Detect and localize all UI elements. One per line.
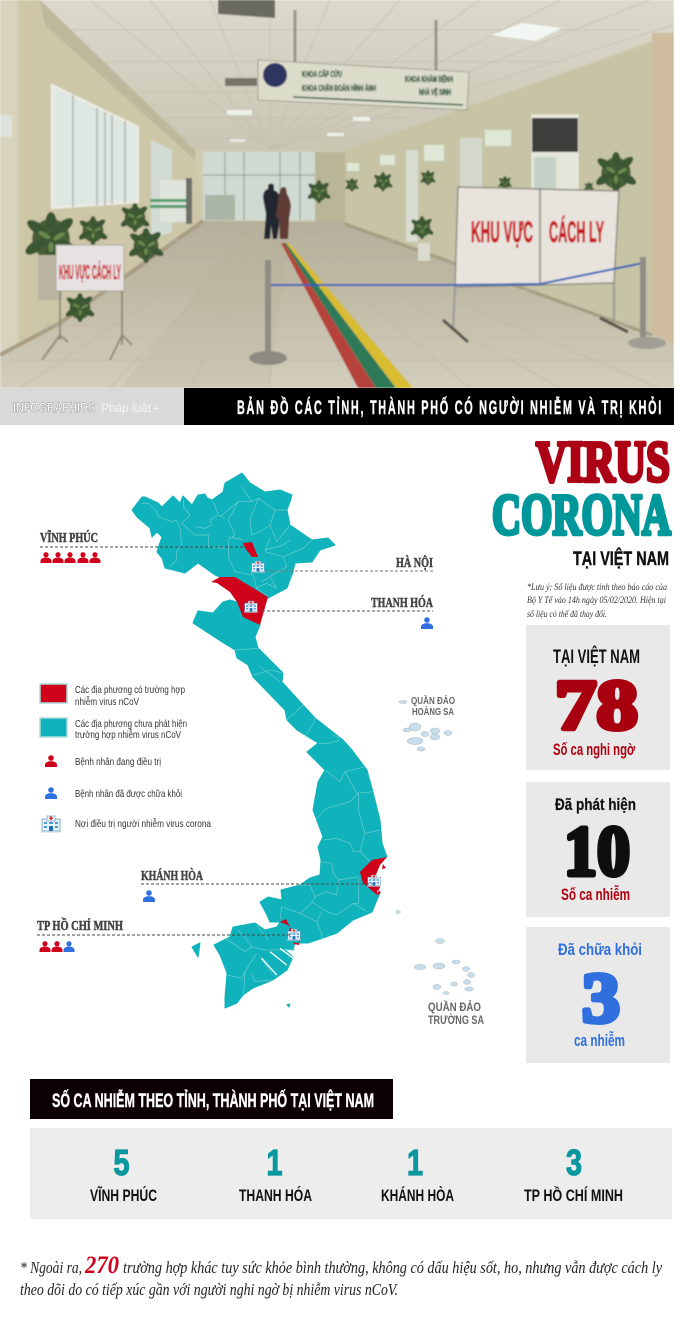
header bar: infographics brand: INFOGRAPHICS xyxy=(13,399,95,415)
stat card: suspected cases: TẠI VIỆT NAM xyxy=(553,646,640,668)
quarantine sign: right: KHU VỰC xyxy=(471,216,533,249)
stat card: recovered cases: 3 xyxy=(582,960,620,1038)
header bar: infographics brand xyxy=(0,388,184,425)
stat card: detected cases: Đã phát hiện xyxy=(555,795,636,814)
header bar: infographics brand: + xyxy=(153,403,159,415)
callout: Vĩnh Phúc: VĨNH PHÚC xyxy=(40,530,98,545)
stat: Thanh Hóa xyxy=(239,1142,312,1205)
stat card: suspected cases: 78 xyxy=(555,667,638,745)
map legend: Các địa phương chưa phát hiện xyxy=(75,718,187,730)
callout: Thanh Hóa xyxy=(262,595,433,629)
stat card: recovered cases xyxy=(526,927,670,1063)
stat card: suspected cases: Số ca nghi ngờ xyxy=(553,740,636,759)
hanging direction sign: NHÀ VỆ SINH xyxy=(419,88,451,97)
people in corridor xyxy=(263,184,280,239)
map legend: Bệnh nhân đang điều trị xyxy=(75,756,161,768)
archipelago: Hoàng Sa xyxy=(399,694,455,751)
stat: Khánh Hòa: 1 xyxy=(407,1142,423,1183)
hospital icon: TP Hồ Chí Minh xyxy=(287,929,301,941)
teal country shape xyxy=(132,473,387,1008)
Khánh Hòa xyxy=(360,857,387,895)
callout: TP Hồ Chí Minh: TP HỒ CHÍ MINH xyxy=(37,918,123,933)
map legend: Các địa phương có trường hợp xyxy=(75,684,185,696)
stat: TP Hồ Chí Minh xyxy=(524,1142,623,1205)
footnote: theo dõi do có tiếp xúc gần với người nghi ngờ bị nhiễm virus nCoV. xyxy=(20,1280,398,1299)
section heading: cases by province xyxy=(30,1079,393,1119)
hospital icon: Khánh Hòa xyxy=(367,875,381,887)
map legend: Nơi điều trị người nhiễm virus corona xyxy=(75,817,211,830)
hanging direction sign: KHOA CẤP CỨU xyxy=(302,69,342,79)
right wall xyxy=(345,35,674,345)
infected provinces in red xyxy=(211,542,387,945)
stat: TP Hồ Chí Minh: 3 xyxy=(566,1142,582,1183)
floor stripes xyxy=(281,243,376,388)
map legend xyxy=(40,684,211,832)
ceiling xyxy=(40,0,674,150)
quarantine sign: left xyxy=(42,245,132,360)
panel: cases by province xyxy=(30,1128,672,1219)
floor xyxy=(0,221,674,388)
data note: số liệu có thể đã thay đổi. xyxy=(527,609,607,620)
stat card: detected cases: 10 xyxy=(564,813,630,891)
stat: Thanh Hóa: THANH HÓA xyxy=(239,1186,312,1205)
photo: hospital corridor with quarantine signs xyxy=(0,0,674,388)
stat card: detected cases xyxy=(526,782,670,917)
header bar: infographics brand: Pháp luật xyxy=(101,401,152,415)
hospital icon: Hà Nội xyxy=(251,561,265,573)
TP Hồ Chí Minh xyxy=(280,919,300,945)
stat: Vĩnh Phúc xyxy=(90,1142,157,1205)
quarantine sign: right xyxy=(443,187,628,342)
footnote: * Ngoài ra, xyxy=(20,1258,82,1277)
callout: Khánh Hòa: KHÁNH HÒA xyxy=(141,868,203,883)
stat: TP Hồ Chí Minh: TP HỒ CHÍ MINH xyxy=(524,1186,623,1205)
province boundaries xyxy=(142,500,225,567)
section heading: cases by province: SỐ CA NHIỄM THEO TỈNH, THÀNH PHỐ TẠI VIỆT NAM xyxy=(52,1090,374,1112)
data note xyxy=(527,582,667,620)
archipelago: Trường Sa: QUẦN ĐẢO xyxy=(428,1001,481,1014)
header bar: map title xyxy=(184,388,674,425)
archipelago: Trường Sa xyxy=(396,910,484,1027)
Thanh Hóa xyxy=(211,577,268,625)
stat: Khánh Hòa xyxy=(381,1142,454,1205)
hospital icon: Thanh Hóa xyxy=(244,601,258,613)
footnote xyxy=(20,1252,662,1299)
archipelago: Hoàng Sa: QUẦN ĐẢO xyxy=(411,694,455,707)
title: VIRUS CORONA xyxy=(492,429,671,547)
callout: Vĩnh Phúc xyxy=(40,530,245,563)
quarantine sign: right: CÁCH LY xyxy=(549,215,604,249)
end of corridor window xyxy=(203,152,317,220)
callout: Thanh Hóa: THANH HÓA xyxy=(371,595,433,610)
hanging direction sign xyxy=(258,60,469,110)
stat: Vĩnh Phúc: 5 xyxy=(114,1142,130,1183)
stanchions and blue ribbon xyxy=(249,257,666,365)
callout: Hà Nội: HÀ NỘI xyxy=(396,555,433,570)
stat card: recovered cases: Đã chữa khỏi xyxy=(558,940,642,959)
stat: Khánh Hòa: KHÁNH HÒA xyxy=(381,1186,454,1205)
hanging direction sign: KHOA KHÁM BỆNH xyxy=(405,75,453,84)
hanging direction sign: KHOA CHẨN ĐOÁN HÌNH ẢNH xyxy=(302,84,376,93)
archipelago: Trường Sa: TRƯỜNG SA xyxy=(428,1014,484,1027)
map legend: nhiễm virus nCoV xyxy=(75,695,139,708)
stat: Vĩnh Phúc: VĨNH PHÚC xyxy=(90,1185,157,1205)
map of Vietnam xyxy=(132,473,387,1008)
photo: hospital corridor with quarantine signs: KHU VỰC CÁCH LY xyxy=(59,261,121,284)
ceiling lights xyxy=(491,23,562,41)
Vĩnh Phúc xyxy=(243,542,258,557)
stat: Thanh Hóa: 1 xyxy=(266,1142,282,1183)
plants xyxy=(23,212,79,265)
stat card: detected cases: Số ca nhiễm xyxy=(561,885,630,904)
map legend: Bệnh nhân đã được chữa khỏi xyxy=(75,788,182,800)
callout: TP Hồ Chí Minh xyxy=(37,918,290,952)
left windows xyxy=(52,85,138,208)
archipelago: Hoàng Sa: HOÀNG SA xyxy=(412,705,454,718)
doors on right wall xyxy=(532,115,578,195)
map legend: trường hợp nhiễm virus nCoV xyxy=(75,728,181,741)
callout: Khánh Hòa xyxy=(141,868,372,902)
left wall xyxy=(0,0,203,352)
stat card: recovered cases: ca nhiễm xyxy=(574,1031,625,1050)
footnote: 270 xyxy=(84,1252,119,1279)
stat card: suspected cases xyxy=(526,625,670,770)
